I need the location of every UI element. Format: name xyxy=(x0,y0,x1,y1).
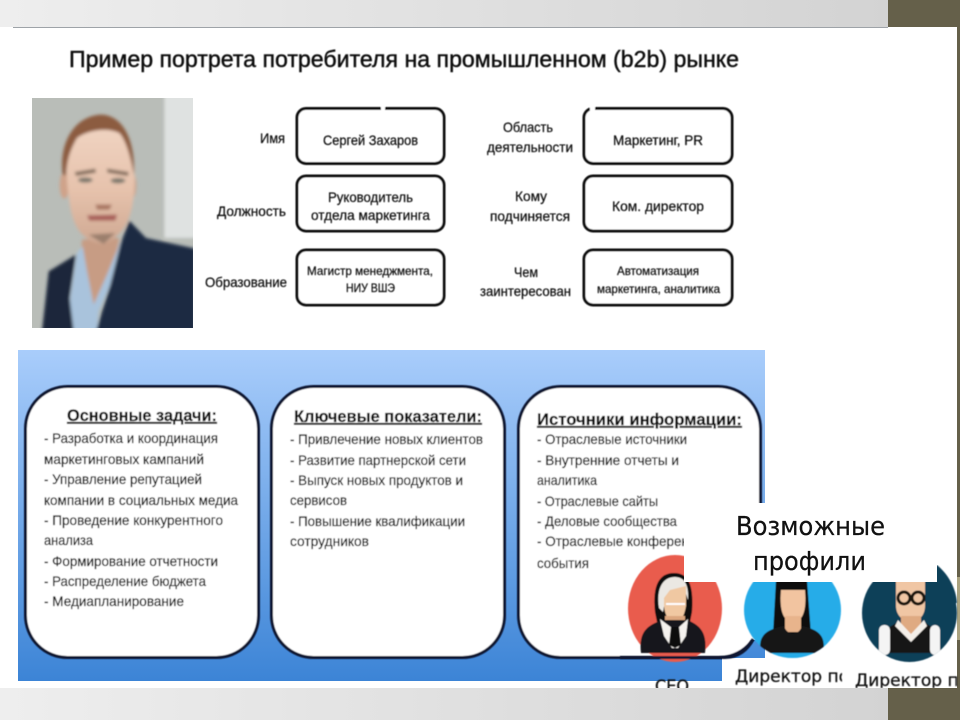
card: information sources xyxy=(518,386,760,658)
field labels: Область xyxy=(503,119,553,135)
white overlay for possible profiles xyxy=(684,503,957,582)
field labels: деятельности xyxy=(487,139,573,155)
field values: Автоматизация xyxy=(617,264,699,278)
card: main tasks: - Разработка и координация xyxy=(44,430,218,446)
field labels: Должность xyxy=(217,203,286,219)
card: main tasks: - Проведение конкурентного xyxy=(44,512,223,528)
field labels: подчиняется xyxy=(490,208,570,224)
card: information sources: - Деловые сообщества xyxy=(537,513,677,529)
card: key metrics: - Привлечение новых клиентов xyxy=(290,431,483,447)
icon: man with glasses avatar xyxy=(862,564,957,662)
card: key metrics: - Повышение квалификации xyxy=(290,513,465,529)
card: key metrics: Ключевые показатели: xyxy=(294,407,482,426)
title: Пример портрета потребителя на промышленном (b2b) рынке xyxy=(69,46,739,72)
heading: possible profiles: профили xyxy=(753,547,866,577)
blue panel xyxy=(18,350,765,681)
card: main tasks: - Формирование отчетности xyxy=(44,553,218,569)
field values: Маркетинг, PR xyxy=(613,132,703,148)
profile captions xyxy=(654,668,958,688)
card: main tasks: Основные задачи: xyxy=(67,406,217,425)
field labels: Чем xyxy=(514,264,538,280)
card: information sources: - Отраслевые конференции и xyxy=(537,533,723,549)
heading: possible profiles: Возможные xyxy=(736,512,885,542)
card: main tasks xyxy=(26,386,258,658)
profile captions: CEO xyxy=(655,677,689,697)
field values: Сергей Захаров xyxy=(323,132,418,148)
card: main tasks: анализа xyxy=(44,532,93,548)
field values: Ком. директор xyxy=(612,198,704,214)
field values: маркетинга, аналитика xyxy=(597,282,720,296)
field labels: заинтересован xyxy=(480,283,571,299)
field values: Магистр менеджмента, xyxy=(307,264,433,278)
profile captions: Директор по xyxy=(735,667,849,687)
field labels: Кому xyxy=(515,188,547,204)
white cover under profile images xyxy=(722,582,767,688)
bottom band xyxy=(0,688,960,720)
field labels: Имя xyxy=(260,130,285,146)
field values: Руководитель xyxy=(328,189,413,205)
card: key metrics: - Выпуск новых продуктов и xyxy=(290,472,463,488)
icon: woman avatar xyxy=(743,582,842,659)
field values: НИУ ВШЭ xyxy=(346,281,395,295)
field values: отдела маркетинга xyxy=(311,207,430,223)
card: main tasks: - Распределение бюджета xyxy=(44,573,206,589)
field values xyxy=(307,132,720,296)
card: information sources: события xyxy=(537,555,589,571)
card: information sources: - Отраслевые сайты xyxy=(537,493,658,509)
card: main tasks: - Медиапланирование xyxy=(44,593,184,609)
field labels: Образование xyxy=(205,274,287,290)
card: main tasks: маркетинговых кампаний xyxy=(44,451,204,467)
card: main tasks: компании в социальных медиа xyxy=(44,492,238,508)
card: key metrics: - Развитие партнерской сети xyxy=(290,452,466,468)
portrait photo xyxy=(32,91,201,331)
heading: possible profiles xyxy=(736,512,885,577)
card: information sources: аналитика xyxy=(537,472,597,488)
card: key metrics: сотрудников xyxy=(290,533,369,549)
card: key metrics: сервисов xyxy=(290,492,347,508)
profile field boxes xyxy=(297,106,732,305)
card: main tasks: - Управление репутацией xyxy=(44,471,202,487)
card: information sources: - Внутренние отчеты и xyxy=(537,452,679,468)
card: information sources: Источники информации: xyxy=(537,410,742,429)
card: information sources: - Отраслевые источники xyxy=(537,431,687,447)
icon: CEO avatar xyxy=(620,555,753,662)
card: key metrics xyxy=(272,386,504,658)
field labels xyxy=(205,119,573,299)
